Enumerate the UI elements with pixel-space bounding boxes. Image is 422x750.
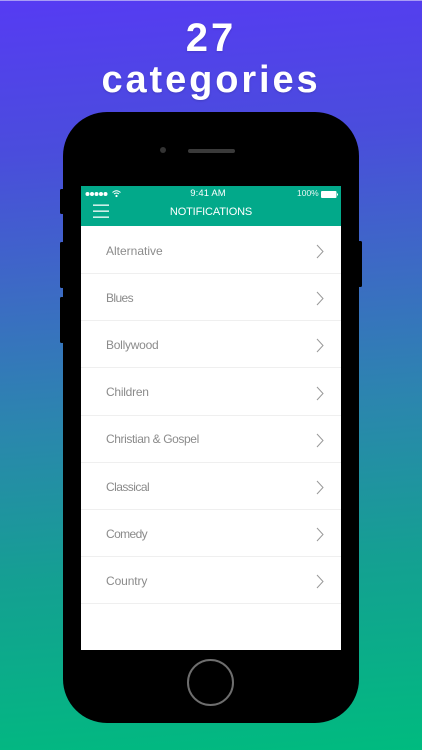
title line: 27: 27 <box>186 16 236 60</box>
row: Country <box>81 556 341 604</box>
app header <box>81 186 341 226</box>
row: Christian & Gospel <box>81 415 341 463</box>
row: Blues: Blues <box>106 291 133 305</box>
side button: power <box>358 241 362 287</box>
screen <box>81 186 341 650</box>
side button: mute <box>60 189 64 214</box>
row: Alternative: Alternative <box>106 244 163 258</box>
hamburger menu icon <box>93 204 109 218</box>
side button: volume up <box>60 242 64 288</box>
row: Classical <box>81 462 341 510</box>
row: Alternative <box>81 226 341 274</box>
row: Children <box>81 368 341 416</box>
battery percent: 100% <box>297 188 319 198</box>
row: Children: Children <box>106 385 149 399</box>
status time: 9:41 AM <box>190 188 226 199</box>
row: Classical: Classical <box>106 480 149 494</box>
row: Comedy: Comedy <box>106 527 147 541</box>
home button <box>187 659 234 706</box>
battery icon <box>321 191 338 198</box>
front camera <box>160 147 166 153</box>
signal dots <box>86 192 108 196</box>
row: Comedy <box>81 509 341 557</box>
row: Blues <box>81 273 341 321</box>
speaker <box>188 148 235 152</box>
row: Bollywood <box>81 320 341 368</box>
side button: volume down <box>60 297 64 343</box>
title <box>101 16 321 102</box>
row: Christian & Gospel: Christian & Gospel <box>106 432 199 446</box>
category list <box>81 244 341 604</box>
header title: NOTIFICATIONS <box>170 206 252 218</box>
phone mockup <box>60 112 362 723</box>
phone body <box>63 112 359 723</box>
title line: categories: categories <box>101 59 321 101</box>
row: Country: Country <box>106 574 147 588</box>
top edge highlight <box>0 0 422 1</box>
wifi icon <box>112 190 121 198</box>
row: Bollywood: Bollywood <box>106 338 158 352</box>
